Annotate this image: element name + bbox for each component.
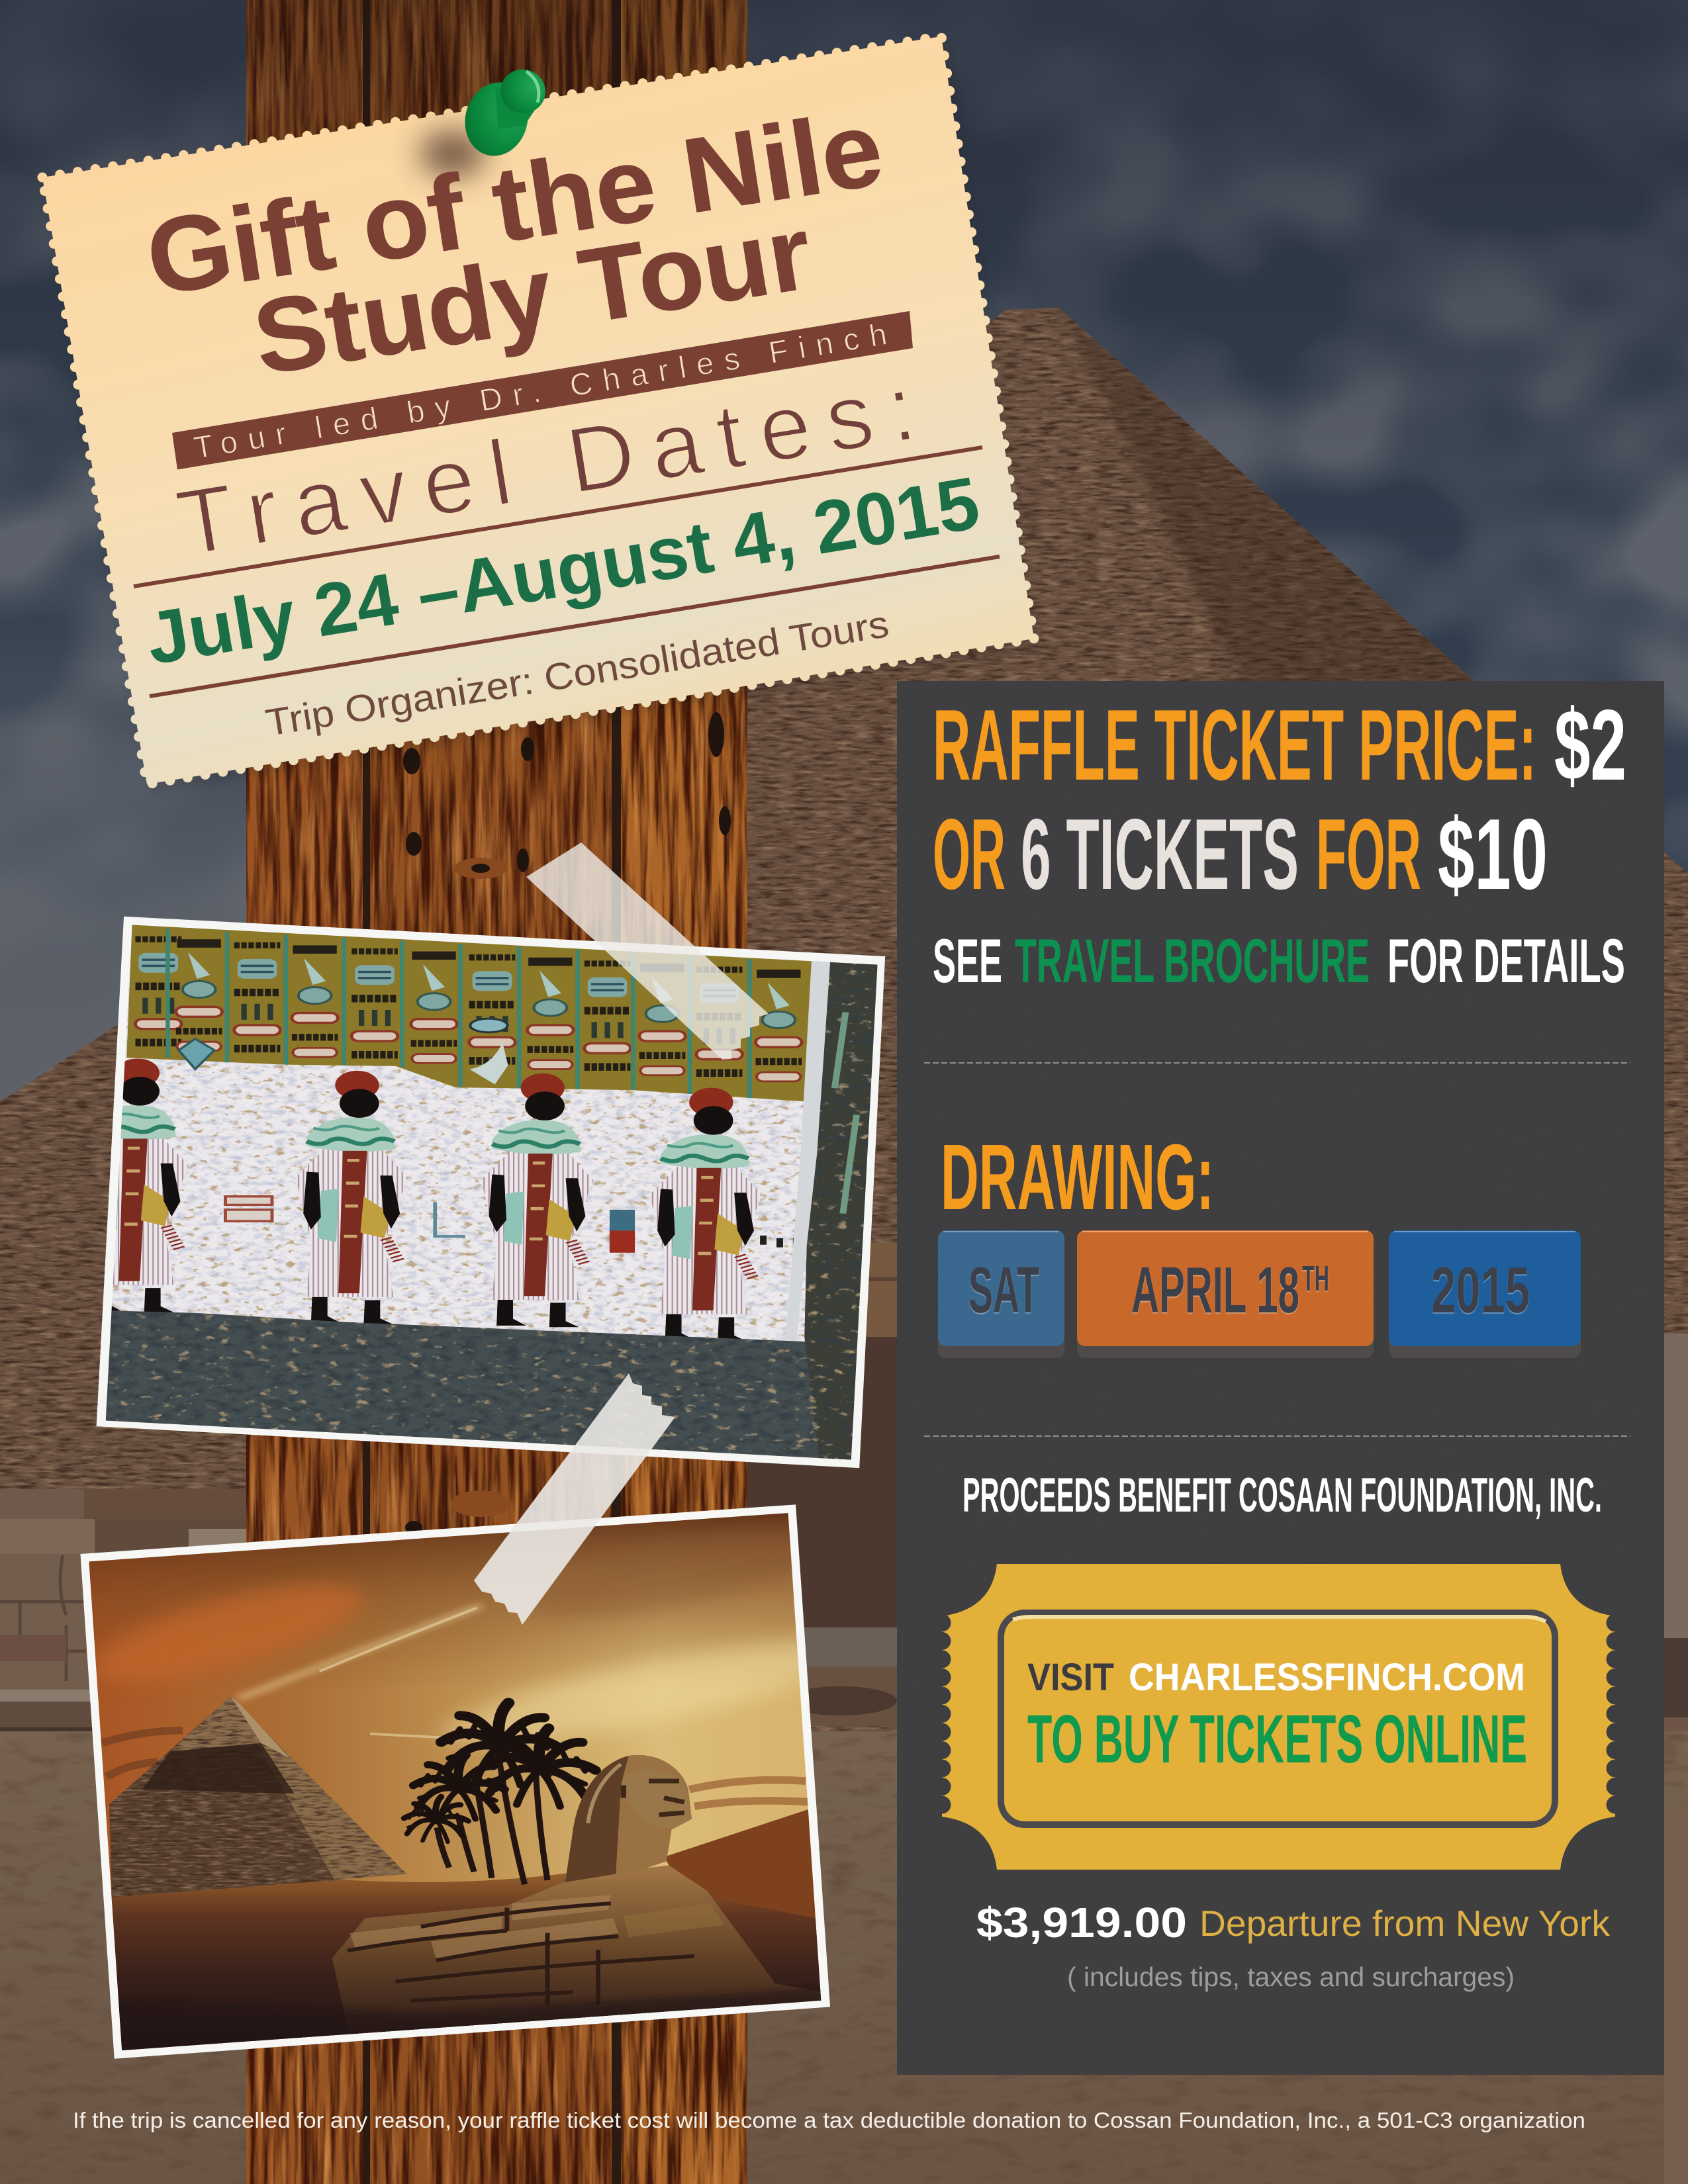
ticket inner frame xyxy=(1001,1613,1555,1825)
title: Study Tour xyxy=(246,194,819,397)
dark slate dado xyxy=(99,1310,857,1464)
visit website: CHARLESSFINCH.COM xyxy=(1129,1656,1525,1699)
photo image xyxy=(76,921,890,1464)
button: day xyxy=(938,1230,1064,1358)
price and departure xyxy=(976,1899,1610,1946)
pyramid dark right face xyxy=(1064,316,1474,681)
hieroglyph frieze xyxy=(126,925,814,1101)
note card: tour title xyxy=(42,36,1034,784)
panel: raffle information xyxy=(897,681,1664,2075)
sky xyxy=(0,0,1688,1257)
button: date: APRIL 18 xyxy=(1131,1253,1299,1326)
button: year xyxy=(1389,1230,1581,1358)
distant dunes xyxy=(664,1809,826,1992)
button: date xyxy=(1077,1230,1374,1358)
photo image xyxy=(76,1507,864,2064)
plank middle xyxy=(370,0,612,2184)
tape strip: lower xyxy=(474,1373,675,1625)
icon: green push pin xyxy=(457,63,551,163)
perforated paper xyxy=(42,36,1034,784)
sand foreground xyxy=(97,1872,826,2060)
raffle price: FOR xyxy=(1316,798,1421,911)
note card shadow xyxy=(46,44,1038,792)
panel background xyxy=(897,681,1664,2075)
palm trees xyxy=(404,1703,596,1884)
see travel brochure: TRAVEL BROCHURE xyxy=(1015,926,1370,995)
photo white frame xyxy=(97,917,885,1468)
golden ticket xyxy=(942,1564,1615,1870)
tour leader band: Tour led by Dr. Charles Finch xyxy=(191,316,889,465)
raffle price: 6 TICKETS xyxy=(1021,798,1299,911)
tape strip: upper xyxy=(526,842,769,1060)
raffle price: OR xyxy=(933,798,1006,911)
travel dates: July 24 –August 4, 2015 xyxy=(141,461,985,680)
right dark recess xyxy=(804,959,884,1464)
sphinx stone strata xyxy=(350,1895,618,1958)
price and departure: $3,919.00 xyxy=(976,1899,1187,1946)
trip organizer: Trip Organizer: Consolidated Tours xyxy=(263,603,892,745)
raffle price: $10 xyxy=(1438,798,1548,911)
white plaster wall xyxy=(99,921,890,1464)
rule below dates xyxy=(150,557,1000,696)
bottom vignette xyxy=(97,1988,826,2060)
photo: tomb painting of four figures xyxy=(76,917,890,1468)
travel dates heading: Travel Dates: xyxy=(170,355,922,576)
desert sand xyxy=(0,1731,1688,2184)
wood knots and nail holes xyxy=(403,712,731,1534)
sphinx xyxy=(332,1755,821,2038)
photo white frame xyxy=(80,1504,830,2059)
pyramid xyxy=(109,1697,406,1897)
title: Gift of the Nile xyxy=(139,88,890,318)
light wall edge xyxy=(785,959,830,1341)
plank right xyxy=(621,0,747,2184)
pin shadow on paper xyxy=(420,130,486,177)
right side sand xyxy=(1664,1812,1688,2184)
plank left xyxy=(246,0,363,2184)
button: year: 2015 xyxy=(1431,1253,1530,1326)
button: date: TH xyxy=(1302,1259,1329,1298)
raffle price xyxy=(933,689,1626,911)
see travel brochure: SEE xyxy=(933,926,1002,995)
wooden post xyxy=(246,0,747,2184)
sunset sky xyxy=(76,1507,864,2064)
ruins and shadowed stone xyxy=(0,1243,1688,1813)
price note: ( includes tips, taxes and surcharges) xyxy=(1067,1962,1515,1992)
drawing heading: DRAWING: xyxy=(941,1124,1214,1229)
rule above dates xyxy=(134,447,982,586)
visit website: VISIT xyxy=(1027,1656,1114,1699)
button: day: SAT xyxy=(968,1253,1039,1326)
raffle price: $2 xyxy=(1554,689,1626,801)
price and departure: Departure from New York xyxy=(1199,1903,1610,1944)
photo: pyramid, palms and sphinx at sunset xyxy=(76,1504,864,2064)
four painted figures xyxy=(76,1058,796,1342)
footer disclaimer: If the trip is cancelled for any reason, your raffle ticket cost will become a tax deductible donation to Cossan Foundation, Inc., a 501-C3 organization xyxy=(73,2108,1585,2132)
